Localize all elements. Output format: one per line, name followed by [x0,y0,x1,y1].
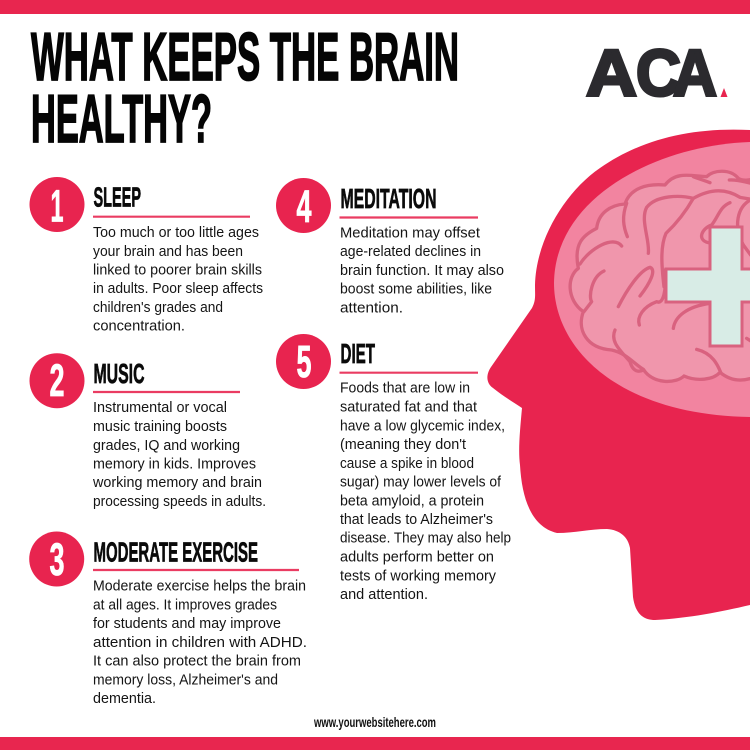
badge 2 [30,353,84,408]
title [31,19,459,157]
body: moderate exercise [93,579,307,707]
body: diet: and attention. [340,587,428,603]
website footer: www.yourwebsitehere.com [313,714,436,730]
badge 4: 4 [296,181,312,232]
skull interior [554,142,750,417]
body: meditation: attention. [340,300,403,316]
body: meditation: boost some abilities, like [340,282,492,298]
body: music: music training boosts [93,419,227,435]
body: sleep: in adults. Poor sleep affects [93,281,263,297]
body: music [92,400,266,510]
body: diet: sugar) may lower levels of [340,475,502,491]
panel: meditation [276,178,504,316]
body: moderate exercise: for students and may improve [93,616,281,632]
heading: moderate exercise: MODERATE EXERCISE [94,536,258,568]
panel: diet [276,334,511,603]
body: moderate exercise: dementia. [93,691,156,707]
panel: sleep [30,177,263,335]
body: meditation [340,226,504,316]
body: moderate exercise: memory loss, Alzheimer's and [93,672,278,688]
body: music: working memory and brain [92,475,262,491]
body: moderate exercise: attention in children with ADHD. [93,635,307,651]
body: moderate exercise: at all ages. It improves grades [93,597,277,613]
body: diet: cause a spike in blood [340,456,474,472]
body: sleep [93,225,263,335]
badge 5: 5 [296,336,312,387]
body: meditation: brain function. It may also [340,263,504,279]
body: diet: have a low glycemic index, [340,418,505,434]
body: diet: Foods that are low in [340,381,470,397]
body: diet: saturated fat and that [340,400,477,416]
logo: ACA [586,36,728,110]
badge 5 [276,334,331,389]
body: sleep: your brain and has been [93,244,243,260]
body: diet: adults perform better on [340,550,494,566]
body: sleep: children's grades and [93,300,223,316]
body: music: Instrumental or vocal [93,400,227,416]
body: sleep: concentration. [93,319,185,335]
heading: sleep: SLEEP [94,182,141,213]
head silhouette with brain [487,130,750,620]
badge 1: 1 [50,180,64,232]
title: HEALTHY? [31,81,212,157]
body: meditation: age-related declines in [340,244,481,260]
heading: music: MUSIC [94,358,144,389]
logo: ACA: C [636,36,681,110]
body: sleep: linked to poorer brain skills [93,262,262,278]
body: diet: that leads to Alzheimer's [340,512,493,528]
body: music: memory in kids. Improves [93,457,256,473]
logo: ACA: A [673,36,717,110]
panel: moderate exercise [29,532,307,707]
badge 2: 2 [50,355,64,406]
body: moderate exercise: It can also protect the brain from [93,654,301,670]
bottom bar [0,737,750,750]
badge 1 [30,177,84,232]
badge 4 [276,178,331,233]
body: diet: beta amyloid, a protein [340,493,484,509]
body: music: processing speeds in adults. [93,494,266,510]
heading: diet: DIET [340,338,375,369]
logo: ACA: A [586,36,637,110]
body: diet: disease. They may also help [340,531,511,547]
body: diet: (meaning they don't [340,437,466,453]
head [487,130,750,620]
medical cross [666,227,750,346]
heading: meditation: MEDITATION [340,183,436,214]
body: meditation: Meditation may offset [340,226,480,242]
body: sleep: Too much or too little ages [93,225,259,241]
body: moderate exercise: Moderate exercise helps the brain [93,579,306,595]
badge 3: 3 [50,534,64,585]
body: music: grades, IQ and working [93,438,240,454]
panel: music [30,353,266,510]
body: diet [340,381,511,603]
body: diet: tests of working memory [340,568,497,584]
badge 3 [29,532,84,586]
brain [570,171,750,381]
top bar [0,0,750,14]
